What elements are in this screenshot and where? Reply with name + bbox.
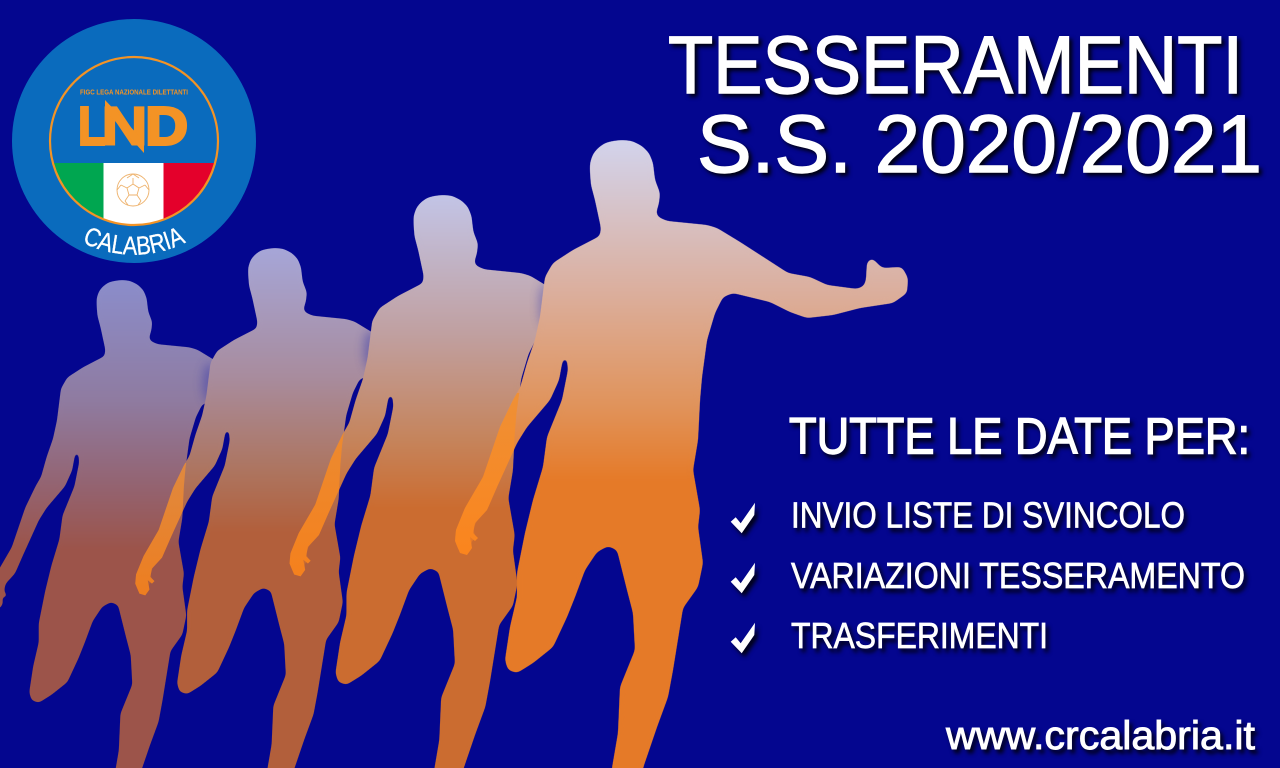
icon: check 1 bbox=[731, 503, 755, 533]
website: www.crcalabria.it bbox=[945, 714, 1255, 758]
football icon bbox=[117, 174, 149, 206]
list item 1: INVIO LISTE DI SVINCOLO bbox=[791, 494, 1185, 536]
list item 3: TRASFERIMENTI bbox=[791, 615, 1048, 656]
icon: check 2 bbox=[731, 563, 755, 593]
LND letters bbox=[78, 96, 188, 156]
silhouette 2 forearm overlap bbox=[135, 463, 186, 596]
logo: LND Calabria badge bbox=[12, 19, 256, 263]
CALABRIA arc text: CALABRIA bbox=[85, 228, 186, 255]
logo disc bbox=[12, 19, 256, 263]
logo ring bbox=[50, 57, 218, 225]
silhouette 4 forearm overlap bbox=[455, 393, 520, 555]
silhouette 4 bbox=[455, 140, 908, 768]
silhouette 3 bbox=[290, 195, 706, 768]
icon: check 3 bbox=[731, 623, 755, 653]
logo small heading: FIGC LEGA NAZIONALE DILETTANTI bbox=[80, 88, 188, 96]
LND letters: D bbox=[145, 96, 188, 156]
silhouette 3 forearm overlap bbox=[290, 432, 344, 576]
Italian flag band bbox=[54, 163, 214, 224]
silhouette 1 bbox=[0, 280, 349, 768]
player silhouettes bbox=[0, 140, 908, 768]
LND letters: N bbox=[102, 96, 148, 156]
silhouette 2 bbox=[135, 248, 514, 768]
title line 2: S.S. 2020/2021 bbox=[697, 99, 1262, 190]
LND letters: L bbox=[78, 96, 105, 156]
